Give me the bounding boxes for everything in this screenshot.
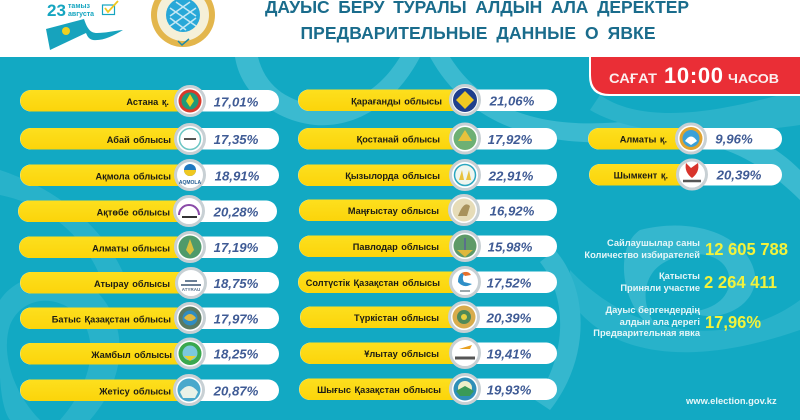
row: Абай: Абай облысы [107, 135, 171, 145]
time badge: ЧАСОВ [728, 71, 779, 86]
row: Солтүстік Қазақстан: Солтүстік Қазақстан облысы [306, 278, 440, 288]
stat: participants: Қатысты [659, 271, 700, 281]
row: Ұлытау [300, 338, 557, 368]
row: Астана: Астана қ. [126, 97, 169, 107]
row: Шымкент қ.: Шымкент қ. [614, 170, 668, 180]
row: Павлодар: 15,98% [488, 240, 533, 254]
row: Ақмола [20, 160, 279, 190]
stat: preliminary turnout [593, 305, 761, 338]
row: Түркістан [300, 302, 557, 332]
row: Маңғыстау: 16,92% [490, 204, 535, 218]
column 2: regions [298, 86, 557, 404]
row: Батыс Қазақстан: 17,97% [214, 312, 259, 326]
row: Қостанай: 17,92% [488, 132, 533, 147]
row: Солтүстік Қазақстан: 17,52% [487, 276, 532, 290]
stat: voters: Количество избирателей [584, 250, 700, 260]
row: Қызылорда: Қызылорда облысы [345, 171, 440, 181]
row: Қызылорда [298, 160, 557, 190]
row: Жамбыл: 18,25% [214, 346, 259, 362]
logo: election date with flag ribbon: августа [68, 11, 94, 18]
title: ПРЕДВАРИТЕЛЬНЫЕ ДАННЫЕ О ЯВКЕ [300, 23, 656, 43]
stat: participants [620, 271, 777, 293]
row: Астана [20, 86, 279, 116]
row: Жетісу [20, 376, 279, 404]
row: Маңғыстау: Маңғыстау облысы [348, 206, 439, 216]
stat: preliminary turnout: Предварительная явка [593, 328, 701, 338]
row: Шығыс Қазақстан: 19,93% [487, 382, 532, 398]
row: Атырау: 18,75% [214, 276, 259, 291]
column 1: regions [18, 86, 279, 404]
row: Павлодар [299, 232, 557, 260]
stat: voters: Сайлаушылар саны [607, 238, 700, 248]
row: Қарағанды: Қарағанды облысы [351, 96, 442, 106]
logo: election date with flag ribbon [46, 1, 123, 50]
row: Алматы облысы [19, 232, 278, 262]
row: Жамбыл [20, 339, 279, 368]
row: Алматы облысы: Алматы облысы [92, 244, 170, 254]
row: Алматы облысы: 17,19% [214, 240, 259, 255]
time badge: 10:00 [664, 63, 723, 88]
logo: election date with flag ribbon: тамыз [68, 3, 90, 10]
stat: preliminary turnout: алдын ала дерегі [620, 317, 700, 327]
row: Ақмола: AQMOLA [179, 180, 201, 186]
website link text: www.election.gov.kz [685, 395, 777, 406]
row: Қарағанды: 21,06% [489, 94, 535, 108]
time badge [589, 57, 800, 96]
row: Абай: 17,35% [214, 132, 259, 147]
logo: election date with flag ribbon: 23 [47, 1, 66, 20]
row: Алматы қ.: 9,96% [715, 132, 753, 146]
row: Шығыс Қазақстан: Шығыс Қазақстан облысы [317, 385, 441, 395]
row: Атырау: ATYRAU [182, 287, 200, 292]
column 3: cities [588, 124, 782, 189]
row: Солтүстік Қазақстан [298, 268, 557, 296]
row: Қарағанды [298, 86, 557, 114]
row: Астана: 17,01% [214, 94, 259, 110]
row: Павлодар: Павлодар облысы [353, 242, 439, 252]
row: Шығыс Қазақстан [299, 374, 557, 404]
row: Жамбыл: Жамбыл облысы [90, 350, 172, 360]
row: Ақмола: Ақмола облысы [96, 172, 171, 182]
stat: participants: 2 264 411 [704, 272, 777, 292]
logo: central election commission emblem [151, 0, 215, 47]
row: Абай [20, 124, 279, 154]
row: Атырау: Атырау облысы [94, 279, 170, 289]
row: Түркістан: 20,39% [486, 310, 532, 326]
row: Шымкент қ.: 20,39% [716, 168, 762, 182]
row: Түркістан: Түркістан облысы [354, 313, 439, 323]
title [265, 0, 689, 43]
row: Шымкент қ. [589, 160, 782, 189]
row: Алматы қ. [588, 124, 782, 153]
row: Алматы қ.: Алматы қ. [620, 134, 667, 144]
row: Ақтөбе: Ақтөбе облысы [97, 208, 170, 218]
stat: participants: Приняли участие [620, 283, 700, 293]
row: Ұлытау: Ұлытау облысы [364, 349, 439, 359]
time badge: САҒАТ [609, 71, 658, 86]
row: Атырау [20, 268, 279, 298]
row: Ақтөбе [18, 196, 277, 226]
stat: preliminary turnout: Дауыс бергендердің [605, 305, 700, 315]
stat: voters: 12 605 788 [705, 239, 788, 259]
row: Ақтөбе: 20,28% [213, 204, 259, 220]
row: Ұлытау: 19,41% [487, 346, 532, 362]
stat: voters [584, 238, 788, 260]
stat: preliminary turnout: 17,96% [705, 312, 761, 332]
row: Маңғыстау [299, 196, 557, 224]
row: Жетісу: 20,87% [213, 384, 259, 398]
row: Жетісу: Жетісу облысы [98, 386, 171, 396]
row: Батыс Қазақстан: Батыс Қазақстан облысы [52, 314, 171, 324]
row: Қызылорда: 22,91% [488, 168, 534, 184]
row: Ақмола: 18,91% [215, 168, 260, 184]
row: Қостанай: Қостанай облысы [357, 134, 440, 144]
row: Батыс Қазақстан [20, 304, 279, 332]
row: Қостанай [298, 124, 557, 153]
